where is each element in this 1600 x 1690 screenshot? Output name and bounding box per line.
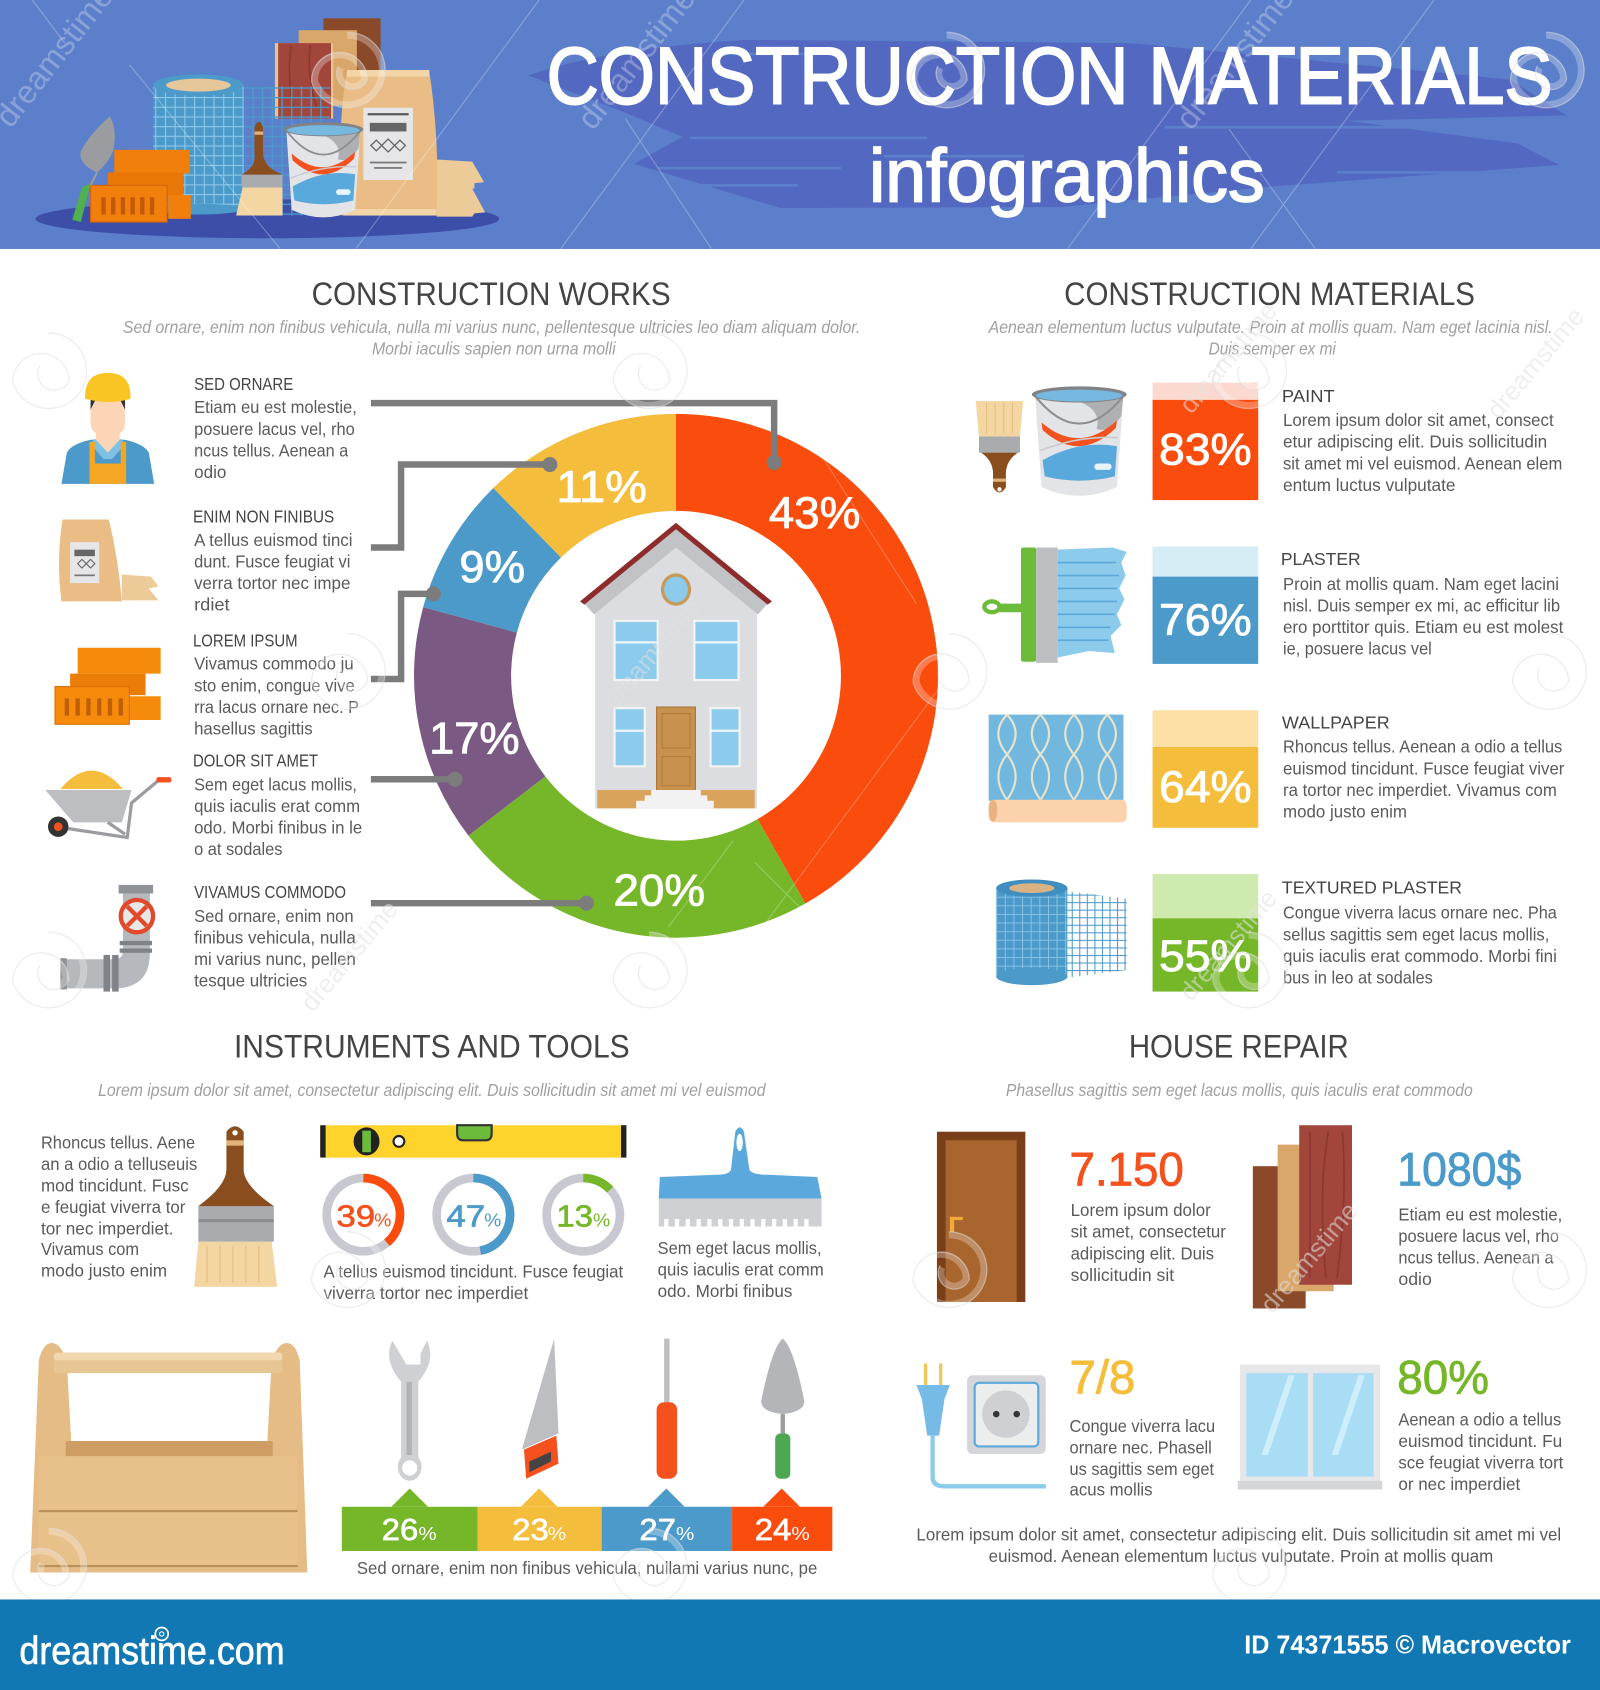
connector 2 — [371, 457, 557, 548]
donut labels: 20% — [613, 866, 705, 915]
watermark text — [296, 297, 1590, 1319]
segment 11% — [493, 414, 676, 558]
segment 27% — [602, 1488, 732, 1551]
section heading: instruments and tools: INSTRUMENTS AND TOOLS — [234, 1028, 630, 1064]
icon: wooden toolbox — [30, 1343, 307, 1573]
icon: worker — [61, 373, 154, 484]
watermark text: dreamstime — [1175, 885, 1283, 1006]
icon: plug and socket — [916, 1363, 1046, 1486]
text: sed ornare — [194, 374, 357, 482]
mesh roll — [153, 74, 244, 214]
footer logo: dreamstime.com — [19, 1630, 285, 1673]
stat tile 55% — [1153, 874, 1258, 992]
icon: screwdriver — [657, 1339, 677, 1479]
footer bar — [0, 1599, 1600, 1690]
icon: door — [937, 1132, 1025, 1302]
icon: wallpaper roll — [989, 715, 1127, 822]
donut labels: 9% — [459, 543, 525, 592]
donut chart — [414, 414, 938, 938]
paint bucket — [284, 122, 363, 217]
segment 24%: % — [791, 1523, 810, 1544]
ring chart 47%: % — [484, 1210, 501, 1231]
text: instruments intro: mod tincidunt. Fusc — [41, 1175, 189, 1195]
panel: wallpaper — [989, 710, 1565, 828]
icon: cement bags — [59, 520, 158, 601]
text: dolor sit amet — [193, 750, 362, 859]
text: enim non finibus — [193, 507, 353, 614]
section heading: instruments and tools: Lorem ipsum dolor sit amet, consectetur adipiscing elit. Duis sollicitudin sit amet mi vel euismod — [98, 1080, 767, 1100]
ring chart 13%: 13 — [556, 1201, 593, 1234]
text: lorem ipsum — [193, 631, 359, 738]
text: dolor sit amet: odo. Morbi finibus in le — [194, 818, 362, 838]
icon: house — [580, 523, 772, 808]
text: lorem ipsum: hasellus sagittis — [194, 718, 313, 738]
header watermark — [32, 0, 1434, 249]
segment 20% — [468, 776, 805, 938]
connector 3 — [371, 586, 441, 679]
text: lorem ipsum: rra lacus ornare nec. P — [194, 697, 359, 717]
watermark text: dreamstime — [1255, 1197, 1364, 1319]
stat: 7.150: sit amet, consectetur — [1071, 1222, 1226, 1242]
section heading: house repair: Phasellus sagittis sem eget lacus mollis, quis iaculis erat commodo — [1006, 1080, 1473, 1100]
text: ring caption: viverra tortor nec imperdiet — [323, 1283, 528, 1303]
text: wallpaper: euismod tincidunt. Fusce feugiat viver — [1283, 758, 1565, 778]
donut labels: 43% — [769, 489, 860, 538]
section heading: construction works: Morbi iaculis sapien non urna molli — [372, 339, 617, 359]
stat: 7.150: adipiscing elit. Duis — [1071, 1243, 1214, 1263]
text: lorem ipsum: sto enim, congue vive — [194, 675, 355, 695]
text: textured plaster: bus in leo at sodales — [1283, 967, 1433, 987]
text: paint: PAINT — [1282, 386, 1335, 406]
icon: pipe with valve — [60, 885, 153, 992]
ring chart 39%: 39 — [336, 1201, 375, 1234]
stat tile 76%: 76% — [1159, 596, 1252, 645]
text: bar caption: Sed ornare, enim non finibus vehicula, nullami varius nunc, pe — [357, 1558, 817, 1578]
stat: 7.150: 7.150 — [1070, 1144, 1184, 1197]
stat: 7.150: sollicitudin sit — [1071, 1265, 1174, 1285]
cement bags — [340, 70, 485, 217]
icon: pointing trowel — [761, 1339, 804, 1479]
stat: 1080$: Etiam eu est molestie, — [1398, 1205, 1562, 1225]
segment 24%: 24 — [755, 1514, 791, 1547]
stat: 1080$ — [1397, 1144, 1562, 1289]
text: paint: entum luctus vulputate — [1283, 475, 1456, 495]
segment 17% — [414, 607, 545, 836]
stat: 7/8: 7/8 — [1070, 1352, 1135, 1405]
text: wallpaper: WALLPAPER — [1282, 713, 1390, 733]
stat: 1080$: ncus tellus. Aenean a — [1398, 1248, 1554, 1268]
icon: spirit level — [320, 1125, 626, 1158]
icon: window — [1238, 1365, 1382, 1490]
text: paint — [1282, 386, 1562, 495]
text: wallpaper — [1282, 713, 1565, 821]
text: plaster: ie, posuere lacus vel — [1283, 639, 1432, 659]
stat: 80%: 80% — [1397, 1352, 1489, 1405]
text: enim non finibus: ENIM NON FINIBUS — [193, 507, 334, 527]
stat tile 64%: 64% — [1159, 763, 1252, 812]
stat: 7/8: Congue viverra lacu — [1070, 1416, 1215, 1436]
text: paint: etur adipiscing elit. Duis sollicitudin — [1283, 432, 1547, 452]
text: plaster — [1281, 549, 1564, 659]
donut labels — [429, 463, 860, 915]
stat: 7/8 — [1070, 1352, 1215, 1499]
icon: plastering spatula — [984, 548, 1127, 663]
text: wallpaper: Rhoncus tellus. Aenean a odio a tellus — [1283, 737, 1562, 757]
ring chart 39%: % — [374, 1210, 391, 1231]
text: vivamus commodo: tesque ultricies — [194, 971, 307, 991]
watermark text: dreamstime — [598, 594, 706, 715]
text: lorem ipsum: LOREM IPSUM — [193, 631, 298, 651]
bricks — [91, 150, 191, 222]
text: sed ornare: SED ORNARE — [194, 374, 293, 394]
icon: paint bucket — [1032, 386, 1127, 496]
panel: plaster — [984, 546, 1564, 664]
section heading: construction works: Sed ornare, enim non finibus vehicula, nulla mi varius nunc, pellentesque ultricies leo diam aliquam dolor. — [123, 317, 860, 337]
watermark text: dreamstime — [1482, 303, 1590, 424]
text: vivamus commodo — [194, 882, 356, 991]
stat: 80%: or nec imperdiet — [1398, 1474, 1520, 1494]
text: instruments intro: tor nec imperdiet. — [41, 1219, 174, 1239]
icon: hand saw — [522, 1339, 558, 1479]
icon: wood planks — [1253, 1125, 1352, 1308]
segment 24% — [732, 1488, 832, 1551]
text: lorem ipsum: Vivamus commodo ju — [194, 654, 354, 674]
header banner — [0, 0, 1600, 249]
header illustration: materials pile — [36, 18, 499, 238]
ring chart 13%: % — [593, 1210, 610, 1231]
segment 9% — [423, 488, 561, 633]
text: plaster: Proin at mollis quam. Nam eget lacini — [1283, 574, 1559, 594]
icon: brush — [976, 401, 1023, 493]
text: textured plaster: TEXTURED PLASTER — [1282, 878, 1462, 898]
icon: notched trowel — [659, 1127, 822, 1227]
footer credit: ID 74371555 © Macrovector — [1244, 1631, 1571, 1659]
stat tile 76% — [1153, 546, 1258, 664]
stat: 80%: Aenean a odio a tellus — [1398, 1409, 1561, 1429]
text: vivamus commodo: finibus vehicula, nulla — [194, 928, 356, 948]
text: sed ornare: ncus tellus. Aenean a — [194, 440, 349, 460]
text: enim non finibus: verra tortor nec impe — [194, 573, 350, 593]
text: enim non finibus: dunt. Fusce feugiat vi — [194, 551, 350, 571]
ring chart 47% — [437, 1178, 510, 1251]
stat: 1080$: odio — [1398, 1269, 1432, 1289]
stat: 80%: euismod tincidunt. Fu — [1398, 1431, 1562, 1451]
section heading: instruments and tools — [98, 1028, 767, 1100]
section heading: construction works: CONSTRUCTION WORKS — [312, 276, 671, 312]
text: dolor sit amet: quis iaculis erat comm — [194, 796, 360, 816]
text: instruments intro: e feugiat viverra tor — [41, 1197, 186, 1217]
section heading: house repair — [1006, 1028, 1473, 1100]
stat tile 64% — [1153, 710, 1258, 828]
text: trowel caption — [658, 1238, 824, 1301]
text: plaster: nisl. Duis semper ex mi, ac efficitur lib — [1283, 596, 1560, 616]
text: dolor sit amet: DOLOR SIT AMET — [193, 750, 318, 770]
header subtitle: infographics — [869, 134, 1265, 218]
stat: 7/8: ornare nec. Phasell — [1070, 1437, 1212, 1457]
text: textured plaster: quis iaculis erat commodo. Morbi fini — [1283, 946, 1557, 966]
segment 26%: % — [418, 1523, 437, 1544]
text: paint: sit amet mi vel euismod. Aenean elem — [1283, 453, 1562, 473]
paint brush strokes behind title — [528, 40, 1567, 208]
text: house repair footnote: euismod. Aenean elementum luctus vulputate. Proin at mollis quam — [989, 1546, 1493, 1566]
panel: paint — [976, 383, 1562, 500]
text: instruments intro: modo justo enim — [41, 1261, 167, 1281]
text: instruments intro — [41, 1132, 197, 1281]
section heading: construction materials: Duis semper ex mi — [1209, 339, 1337, 359]
text: textured plaster: sellus sagittis sem eget lacus mollis, — [1283, 924, 1549, 944]
segment 26%: 26 — [382, 1514, 418, 1547]
ring chart 13% — [547, 1178, 620, 1251]
stat: 80% — [1397, 1352, 1564, 1494]
stacked bar — [342, 1488, 832, 1551]
wood planks — [275, 18, 381, 119]
text: instruments intro: Rhoncus tellus. Aene — [41, 1132, 195, 1152]
text: sed ornare: posuere lacus vel, rho — [194, 419, 355, 439]
segment 26% — [342, 1488, 478, 1551]
text: ring caption: A tellus euismod tincidunt. Fusce feugiat — [323, 1262, 623, 1282]
text: vivamus commodo: VIVAMUS COMMODO — [194, 882, 346, 902]
stat tile 55%: 55% — [1159, 932, 1252, 981]
icon: large brush — [194, 1126, 277, 1287]
donut labels: 17% — [429, 714, 520, 763]
stat: 7/8: us sagittis sem eget — [1070, 1459, 1214, 1479]
segment 43% — [676, 414, 938, 904]
watermark text: dreamstime — [296, 896, 404, 1017]
section heading: house repair: HOUSE REPAIR — [1129, 1028, 1349, 1064]
text: house repair footnote — [916, 1525, 1561, 1566]
section heading: construction materials: CONSTRUCTION MATERIALS — [1064, 276, 1475, 312]
stat: 80%: sce feugiat viverra tort — [1398, 1452, 1564, 1472]
text: plaster: ero porttitor quis. Etiam eu est molest — [1283, 617, 1564, 637]
text: textured plaster: Congue viverra lacus ornare nec. Pha — [1283, 903, 1557, 923]
text: dolor sit amet: o at sodales — [194, 839, 282, 859]
segment 27%: 27 — [639, 1514, 676, 1547]
section heading: construction works — [123, 276, 860, 359]
stat tile 83%: 83% — [1159, 426, 1252, 475]
icon: wheelbarrow — [45, 771, 171, 837]
text: dolor sit amet: Sem eget lacus mollis, — [194, 774, 357, 794]
segment 27%: % — [676, 1523, 694, 1544]
section heading: construction materials — [988, 276, 1553, 359]
text: sed ornare: odio — [194, 462, 226, 482]
icon: wrench — [389, 1341, 430, 1481]
panel: textured plaster — [996, 874, 1557, 992]
watermark text: dreamstime — [1175, 297, 1283, 419]
text: plaster: PLASTER — [1281, 549, 1361, 569]
donut labels: 11% — [556, 463, 647, 512]
stat tile 83% — [1153, 383, 1258, 500]
text: wallpaper: modo justo enim — [1283, 801, 1407, 821]
stat: 7.150: Lorem ipsum dolor — [1071, 1200, 1211, 1220]
extended mesh — [244, 86, 330, 216]
trowel — [72, 116, 115, 222]
text: trowel caption: quis iaculis erat comm — [658, 1259, 824, 1279]
segment 23% — [478, 1488, 602, 1551]
section heading: construction materials: Aenean elementum luctus vulputate. Proin at mollis quam. Nam eget lacinia nisl. — [988, 317, 1553, 337]
ring chart 47%: 47 — [446, 1201, 485, 1234]
text: trowel caption: Sem eget lacus mollis, — [658, 1238, 822, 1258]
segment 23%: % — [548, 1523, 566, 1544]
text: instruments intro: an a odio a telluseuis — [41, 1154, 197, 1174]
text: sed ornare: Etiam eu est molestie, — [194, 397, 357, 417]
connector 4 — [371, 772, 463, 787]
icon: mesh roll — [996, 879, 1127, 985]
stat: 7.150 — [1070, 1144, 1226, 1285]
stat: 1080$: posuere lacus vel, rho — [1398, 1226, 1559, 1246]
text: vivamus commodo: Sed ornare, enim non — [194, 906, 354, 926]
text: vivamus commodo: mi varius nunc, pellen — [194, 949, 356, 969]
connector 1 — [371, 403, 782, 470]
text: enim non finibus: rdiet — [194, 594, 230, 614]
text: instruments intro: Vivamus com — [41, 1239, 139, 1259]
watermark lines over donut — [668, 453, 938, 938]
brush — [236, 122, 282, 216]
text: house repair footnote: Lorem ipsum dolor sit amet, consectetur adipiscing elit. Duis sollicitudin sit amet mi vel — [916, 1525, 1561, 1545]
text: paint: Lorem ipsum dolor sit amet, consect — [1283, 410, 1554, 430]
text: ring caption — [323, 1262, 623, 1303]
text: textured plaster — [1282, 878, 1557, 987]
connector lines — [371, 403, 782, 911]
icon: bricks — [55, 648, 161, 724]
text: enim non finibus: A tellus euismod tinci — [194, 530, 353, 550]
stat: 1080$: 1080$ — [1397, 1144, 1521, 1197]
connector 5 — [371, 896, 594, 911]
stat: 7/8: acus mollis — [1070, 1479, 1153, 1499]
ring chart 39% — [327, 1178, 400, 1251]
text: trowel caption: odo. Morbi finibus — [658, 1281, 792, 1301]
text: wallpaper: ra tortor nec imperdiet. Vivamus com — [1283, 780, 1557, 800]
segment 23%: 23 — [512, 1514, 549, 1547]
